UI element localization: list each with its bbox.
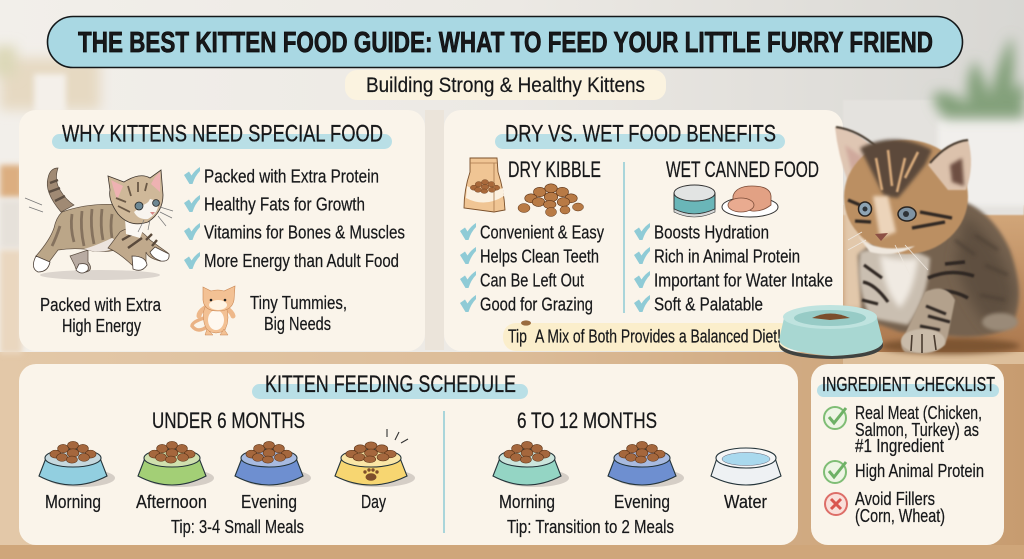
panel: dry vs wet food benefits — [444, 110, 843, 351]
tip: transition: Tip: Transition to 2 Meals — [507, 516, 674, 537]
checklist: wet food: Soft & Palatable — [654, 294, 763, 314]
label: morning: Morning — [45, 491, 101, 512]
bowl: morning — [493, 441, 569, 487]
label: afternoon: Afternoon — [136, 491, 207, 512]
item: high animal protein — [824, 460, 984, 483]
label: morning: Morning — [499, 491, 555, 512]
bowl: evening — [608, 441, 684, 487]
label: evening: Evening — [614, 491, 670, 512]
item: real meat: #1 Ingredient — [855, 435, 944, 456]
group: under 6 months: UNDER 6 MONTHS — [152, 408, 305, 433]
heading: dry vs wet: DRY VS. WET FOOD BENEFITS — [505, 120, 776, 148]
group: 6 to 12 months — [493, 408, 781, 537]
tip banner: Tip — [508, 326, 527, 346]
bowl: morning — [39, 441, 115, 487]
caption: high energy: Packed with Extra — [40, 294, 162, 315]
panel: kitten feeding schedule — [19, 364, 798, 545]
icon: teal bowl in photo — [779, 305, 883, 359]
caption: tiny tummies: Tiny Tummies, — [250, 292, 347, 313]
heading: feeding schedule: KITTEN FEEDING SCHEDULE — [265, 371, 516, 398]
tip banner: A Mix of Both Provides a Balanced Diet! — [535, 326, 781, 346]
heading: dry kibble: DRY KIBBLE — [508, 157, 601, 182]
checklist: why kittens: Vitamins for Bones & Muscles — [204, 222, 405, 242]
caption: high energy: High Energy — [62, 315, 142, 336]
panel: why kittens need special food — [19, 110, 425, 351]
caption: tiny tummies — [250, 292, 347, 334]
item: avoid fillers: Avoid Fillers — [855, 488, 935, 509]
checklist: wet food — [634, 222, 833, 314]
icon: kibble pile — [518, 184, 584, 216]
group: 6 to 12 months: 6 TO 12 MONTHS — [517, 408, 657, 433]
item: avoid fillers — [825, 488, 945, 526]
bowl: water — [711, 448, 781, 485]
item: high animal protein: High Animal Protein — [855, 460, 984, 481]
checklist: dry kibble: Helps Clean Teeth — [480, 246, 599, 266]
checklist: why kittens: Healthy Fats for Growth — [204, 194, 365, 214]
photo: tabby kitten — [835, 127, 1020, 354]
tip: small meals: Tip: 3-4 Small Meals — [171, 516, 304, 537]
checklist: dry kibble — [460, 222, 605, 314]
checklist: why kittens: More Energy than Adult Food — [204, 250, 399, 271]
checklist: why kittens: Packed with Extra Protein — [204, 166, 379, 186]
divider — [623, 162, 625, 313]
checklist: wet food: Rich in Animal Protein — [654, 246, 800, 266]
caption: high energy — [40, 294, 162, 336]
panel: ingredient checklist — [811, 364, 1004, 545]
checklist: why kittens — [184, 166, 405, 271]
illustration: running kitten — [25, 168, 173, 280]
item: real meat: Real Meat (Chicken, — [855, 402, 982, 423]
icon: can — [674, 185, 715, 217]
tip banner — [503, 320, 793, 351]
heading: why kittens: WHY KITTENS NEED SPECIAL FOOD — [62, 120, 383, 148]
heading: wet canned food: WET CANNED FOOD — [666, 157, 819, 182]
group: under 6 months — [39, 408, 415, 537]
bowl: afternoon — [138, 441, 214, 487]
subtitle: Building Strong & Healthy Kittens — [366, 74, 645, 97]
checklist: wet food: Important for Water Intake — [654, 270, 833, 290]
icon: wet food plate — [722, 186, 778, 217]
item: avoid fillers: (Corn, Wheat) — [855, 505, 945, 526]
caption: tiny tummies: Big Needs — [264, 313, 331, 334]
bowl: day — [335, 429, 415, 487]
item: real meat — [824, 402, 982, 456]
label: evening: Evening — [241, 491, 297, 512]
divider — [443, 411, 445, 533]
item: real meat: Salmon, Turkey) as — [855, 419, 979, 440]
bowl: evening — [235, 441, 311, 487]
label: water: Water — [724, 491, 767, 512]
label: day: Day — [361, 491, 387, 512]
checklist: dry kibble: Can Be Left Out — [480, 270, 584, 290]
icon: small orange kitten — [192, 286, 235, 335]
checklist: dry kibble: Good for Grazing — [480, 294, 593, 314]
checklist: wet food: Boosts Hydration — [654, 222, 769, 242]
icon: kibble bag — [464, 158, 505, 212]
checklist: dry kibble: Convenient & Easy — [480, 222, 605, 242]
title banner — [48, 16, 962, 68]
